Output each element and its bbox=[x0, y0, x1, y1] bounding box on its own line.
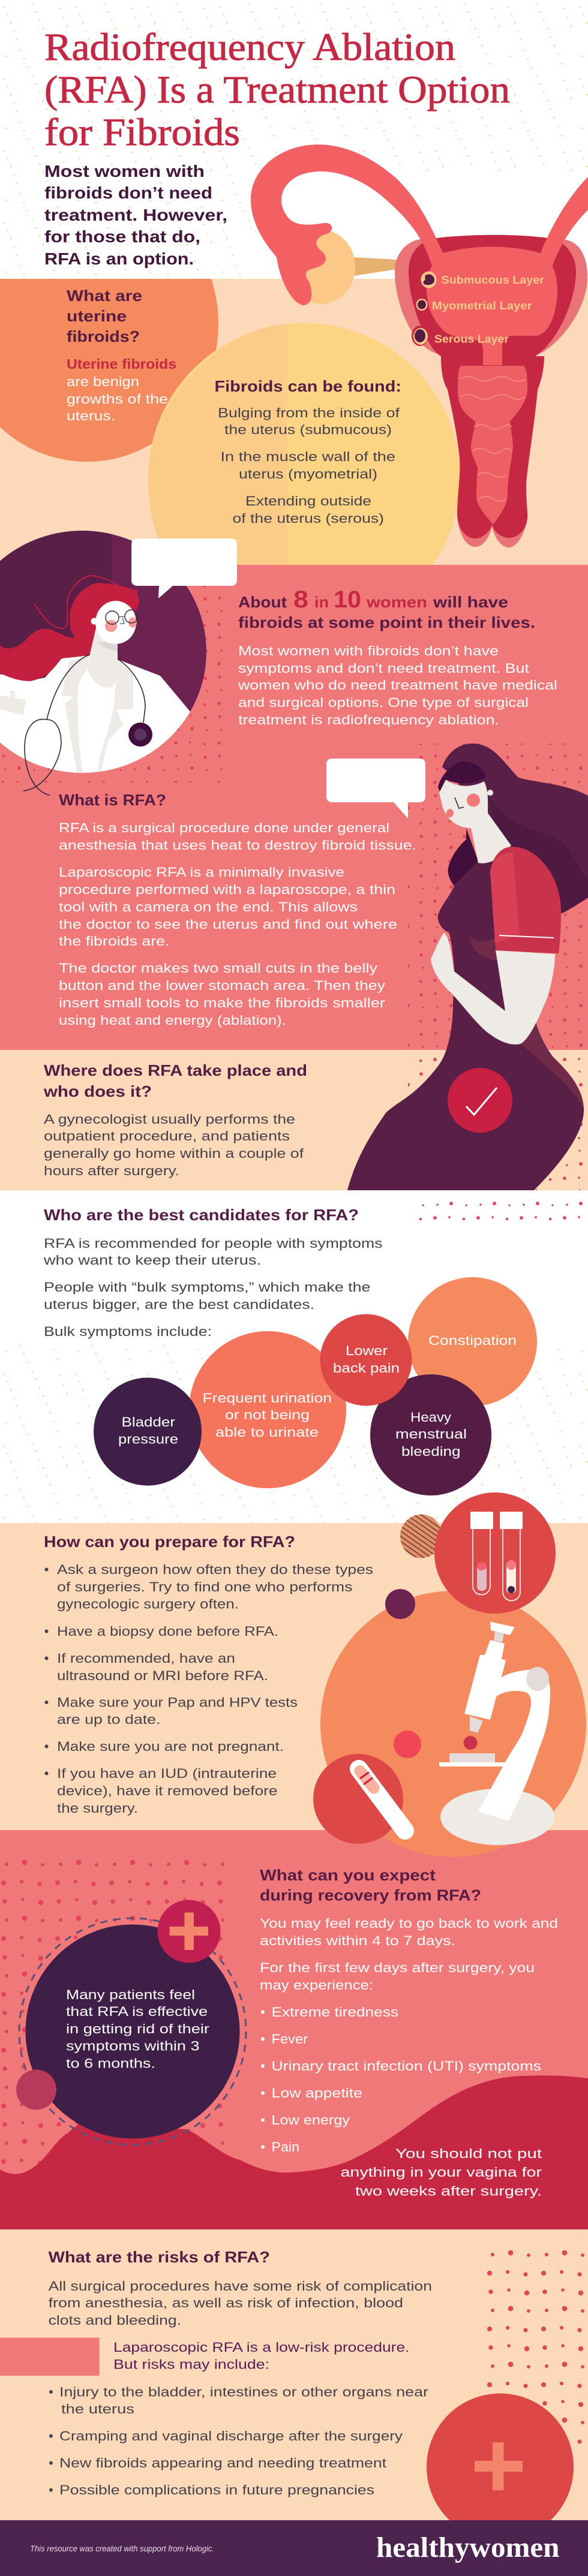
title: Radiofrequency Ablation bbox=[44, 26, 455, 69]
text: fibroids can be found: uterus (myometrial) bbox=[239, 467, 377, 482]
layer labels: Myometrial Layer bbox=[432, 300, 532, 312]
list: risks: • bbox=[49, 2455, 53, 2470]
callout: low-risk procedure: Laparoscopic RFA is a low-risk procedure. bbox=[113, 2340, 409, 2355]
list: risks: • bbox=[49, 2385, 53, 2400]
callout: patients feel RFA is effective: in getting rid of their bbox=[66, 2021, 209, 2036]
list: how to prepare: • bbox=[44, 1651, 49, 1666]
title bbox=[44, 26, 510, 154]
title: for Fibroids bbox=[44, 111, 240, 154]
panel: prepare section background bbox=[0, 1523, 588, 1830]
title: (RFA) Is a Treatment Option bbox=[44, 68, 510, 112]
text: what are uterine fibroids: uterine bbox=[67, 307, 127, 325]
footer bbox=[0, 2520, 588, 2576]
text: fibroids can be found: the uterus (submucous) bbox=[224, 422, 392, 437]
text: what are uterine fibroids: uterus. bbox=[67, 408, 115, 423]
pink circle bbox=[394, 1731, 421, 1758]
intro text bbox=[44, 162, 227, 268]
stat: 8 in 10 women: 10 bbox=[334, 586, 361, 613]
list: recovery symptoms: • bbox=[260, 2005, 265, 2020]
text: risks intro: from anesthesia, as well as risk of infection, blood bbox=[49, 2295, 403, 2310]
text: recovery warning: You should not put bbox=[395, 2146, 542, 2161]
list: risks bbox=[49, 2385, 428, 2497]
list: recovery symptoms: Low appetite bbox=[271, 2086, 362, 2100]
decorative small circle bbox=[16, 2070, 56, 2109]
illustration: woman holding abdomen bbox=[347, 744, 588, 1190]
list: how to prepare: the surgery. bbox=[57, 1801, 138, 1816]
purple circle bbox=[385, 1589, 415, 1619]
list: recovery symptoms bbox=[260, 2005, 541, 2154]
list: how to prepare: • bbox=[44, 1695, 49, 1710]
bubble: bladder pressure: pressure bbox=[118, 1432, 178, 1446]
intro text: fibroids don’t need bbox=[44, 183, 212, 202]
text: what is RFA: RFA is a surgical procedure done under general bbox=[59, 820, 389, 835]
sleeve bbox=[490, 847, 561, 953]
text: treatment overview: women who do need treatment have medical bbox=[238, 678, 557, 693]
heading: where does RFA take place bbox=[43, 1061, 307, 1100]
list: risks: Cramping and vaginal discharge after the surgery bbox=[59, 2428, 403, 2443]
text: treatment overview bbox=[238, 643, 557, 727]
list: how to prepare: Ask a surgeon how often they do these types bbox=[57, 1562, 373, 1577]
text: fibroids can be found: of the uterus (serous) bbox=[233, 511, 384, 526]
text: treatment overview: symptoms and don’t need treatment. But bbox=[238, 661, 529, 676]
panel: recovery section background bbox=[0, 1830, 588, 2229]
text: recovery: activities within 4 to 7 days. bbox=[260, 1933, 455, 1948]
outer uterus layer bbox=[395, 239, 587, 547]
text: fibroids can be found: Bulging from the inside of bbox=[218, 405, 400, 420]
text: what is RFA: Laparoscopic RFA is a minimally invasive bbox=[59, 865, 344, 880]
doctor background circle bbox=[0, 528, 206, 773]
stat: 8 in 10 women: 8 bbox=[293, 586, 308, 613]
layer labels: Submucous Layer bbox=[442, 274, 544, 286]
list: how to prepare: are up to date. bbox=[57, 1712, 161, 1727]
list: risks: Possible complications in future pregnancies bbox=[59, 2482, 374, 2497]
fibroid: submucous bbox=[421, 271, 437, 288]
text: recovery: For the first few days after surgery, you bbox=[260, 1960, 535, 1975]
text: fibroids can be found: Fibroids can be found: bbox=[215, 377, 401, 395]
text: what are uterine fibroids bbox=[67, 287, 176, 423]
callout: patients feel RFA is effective bbox=[19, 1918, 246, 2145]
text: what is RFA: the doctor to see the uterus and find out where bbox=[59, 917, 397, 932]
right fallopian tube bbox=[541, 177, 588, 267]
text: recovery warning bbox=[341, 2146, 542, 2198]
text: recovery: You may feel ready to go back to work and bbox=[260, 1916, 558, 1931]
list: how to prepare: • bbox=[44, 1739, 49, 1754]
bubble: frequent urination bbox=[189, 1331, 346, 1488]
speech bubble: woman bbox=[326, 759, 425, 818]
text: what is RFA: button and the lower stomach area. Then they bbox=[59, 978, 385, 993]
panel: peach fibroids section background bbox=[0, 279, 588, 565]
list: recovery symptoms: • bbox=[260, 2032, 265, 2047]
layer labels bbox=[432, 274, 544, 345]
panel: risks section background bbox=[0, 2229, 588, 2520]
list: recovery symptoms: • bbox=[260, 2139, 265, 2154]
panel: pink RFA section background bbox=[0, 565, 588, 1190]
speech bubble: doctor bbox=[131, 538, 237, 598]
stat: 8 in 10 women: women bbox=[366, 593, 427, 611]
heading: what is RFA: What is RFA? bbox=[59, 791, 166, 809]
layer labels: Serous Layer bbox=[434, 333, 509, 345]
text: what is RFA: anesthesia that uses heat to destroy fibroid tissue. bbox=[59, 838, 416, 853]
text: what are uterine fibroids: Uterine fibroids bbox=[67, 356, 176, 372]
text: what are uterine fibroids: growths of the bbox=[67, 392, 168, 407]
text: best candidates: uterus bigger, are the best candidates. bbox=[44, 1297, 314, 1312]
hair bbox=[442, 744, 588, 916]
stat: 8 in 10 women: will have bbox=[433, 593, 508, 611]
vaginal canal bbox=[458, 366, 527, 525]
callout: patients feel RFA is effective: to 6 months. bbox=[66, 2056, 155, 2071]
bubble: heavy menstrual bleeding: bleeding bbox=[401, 1444, 461, 1459]
list: how to prepare: ultrasound or MRI before RFA. bbox=[57, 1668, 268, 1683]
text: fibroids can be found: Extending outside bbox=[245, 493, 371, 508]
list: recovery symptoms: Extreme tiredness bbox=[271, 2005, 398, 2020]
text: where does RFA take place bbox=[44, 1112, 304, 1178]
text: treatment overview: Most women with fibroids don’t have bbox=[238, 643, 499, 658]
list: risks: • bbox=[49, 2428, 53, 2443]
list: recovery symptoms: Urinary tract infection (UTI) symptoms bbox=[271, 2059, 541, 2074]
uterine cavity bbox=[427, 247, 557, 365]
heading: where does RFA take place: who does it? bbox=[43, 1082, 152, 1100]
list: how to prepare: • bbox=[44, 1624, 49, 1639]
muscle wall bbox=[409, 235, 576, 538]
text: best candidates: who want to keep their uterus. bbox=[43, 1253, 261, 1268]
list: risks: New fibroids appearing and needing treatment bbox=[59, 2455, 386, 2470]
fibroid: serous bbox=[412, 326, 428, 346]
bubble: bladder pressure bbox=[94, 1378, 202, 1486]
text: fibroids can be found bbox=[215, 377, 401, 526]
list: how to prepare bbox=[44, 1562, 373, 1816]
text: where does RFA take place: hours after surgery. bbox=[44, 1163, 179, 1178]
list: risks: the uterus bbox=[61, 2402, 134, 2416]
text: what is RFA: insert small tools to make the fibroids smaller bbox=[59, 995, 385, 1010]
text: best candidates: People with “bulk symptoms,” which make the bbox=[44, 1280, 371, 1295]
list: how to prepare: Make sure your Pap and HPV tests bbox=[57, 1695, 298, 1710]
heading: recovery bbox=[260, 1866, 481, 1904]
callout: low-risk procedure: But risks may include: bbox=[113, 2357, 269, 2372]
illustration: uterus bbox=[251, 145, 588, 547]
text: treatment overview: and surgical options. One type of surgical bbox=[238, 695, 529, 710]
check mark badge bbox=[448, 1068, 512, 1133]
fibroid: myometrial bbox=[416, 299, 427, 311]
callout bar bbox=[0, 2337, 100, 2376]
text: where does RFA take place: A gynecologist usually performs the bbox=[44, 1112, 295, 1127]
dot pattern: recovery bbox=[0, 1850, 225, 2168]
list: recovery symptoms: • bbox=[260, 2059, 265, 2074]
text: best candidates: RFA is recommended for people with symptoms bbox=[44, 1236, 383, 1251]
footer: healthywomen bbox=[376, 2532, 559, 2563]
heading: recovery: during recovery from RFA? bbox=[260, 1886, 481, 1904]
list: recovery symptoms: Fever bbox=[271, 2032, 308, 2047]
text: what are uterine fibroids: What are bbox=[67, 287, 142, 305]
text: where does RFA take place: outpatient procedure, and patients bbox=[44, 1128, 290, 1143]
doctor face bbox=[91, 586, 138, 644]
bubble: heavy menstrual bleeding: menstrual bbox=[395, 1427, 467, 1442]
crimson wave bbox=[0, 2075, 588, 2229]
bubble: frequent urination: able to urinate bbox=[215, 1425, 319, 1440]
illustration: lab equipment bbox=[313, 1492, 586, 1857]
text: what are uterine fibroids: are benign bbox=[67, 374, 139, 389]
neck and face bbox=[438, 762, 511, 863]
list: recovery symptoms: • bbox=[260, 2112, 265, 2127]
microscope bbox=[439, 1621, 554, 1845]
heading: where does RFA take place: Where does RFA take place and bbox=[44, 1061, 307, 1079]
bubble: lower back pain bbox=[320, 1314, 412, 1406]
stethoscope bbox=[23, 655, 152, 795]
circle: fibroids can be found bbox=[148, 323, 460, 565]
bubble: frequent urination: or not being bbox=[225, 1407, 310, 1422]
bubble: constipation: Constipation bbox=[428, 1333, 517, 1348]
list: recovery symptoms: • bbox=[260, 2086, 265, 2100]
list: risks: Injury to the bladder, intestines or other organs near bbox=[59, 2385, 428, 2400]
text: risks intro: All surgical procedures have some risk of complication bbox=[49, 2279, 432, 2294]
intro text: for those that do, bbox=[44, 227, 200, 246]
heading: best candidates: Who are the best candidates for RFA? bbox=[44, 1206, 359, 1224]
dress bbox=[347, 854, 584, 1190]
list: how to prepare: gynecologic surgery often. bbox=[57, 1596, 239, 1612]
list: recovery symptoms: Pain bbox=[271, 2139, 299, 2154]
test tubes bbox=[434, 1492, 556, 1614]
text: what is RFA: the fibroids are. bbox=[59, 934, 169, 949]
list: recovery symptoms: Low energy bbox=[271, 2112, 350, 2127]
icon: plus badge bbox=[157, 1900, 221, 1963]
panel: candidates section background bbox=[0, 1190, 588, 1523]
text: what is RFA bbox=[59, 820, 416, 1028]
text: recovery warning: anything in your vagina for bbox=[341, 2165, 542, 2180]
text: what are uterine fibroids: fibroids? bbox=[67, 327, 140, 345]
doctor figure bbox=[0, 575, 190, 773]
illustration: doctor bbox=[0, 528, 210, 795]
dress shading bbox=[469, 934, 584, 1110]
callout: patients feel RFA is effective: Many patients feel bbox=[66, 1987, 195, 2002]
text: best candidates bbox=[43, 1236, 383, 1339]
list: how to prepare: If recommended, have an bbox=[57, 1651, 235, 1666]
list: how to prepare: • bbox=[44, 1766, 49, 1781]
arm bbox=[431, 932, 555, 1045]
bubble: lower back pain: back pain bbox=[333, 1361, 400, 1376]
callout: patients feel RFA is effective: that RFA is effective bbox=[66, 2004, 208, 2019]
panel: intro background bbox=[0, 0, 588, 279]
stat: 8 in 10 women bbox=[238, 586, 535, 631]
callout: low-risk procedure bbox=[113, 2340, 409, 2372]
pregnancy test bbox=[313, 1754, 405, 1844]
text: what is RFA: procedure performed with a laparoscope, a thin bbox=[59, 882, 395, 897]
callout: patients feel RFA is effective: symptoms within 3 bbox=[66, 2039, 199, 2053]
text: best candidates: Bulk symptoms include: bbox=[44, 1324, 212, 1339]
intro text: RFA is an option. bbox=[44, 249, 194, 268]
list: how to prepare: of surgeries. Try to find one who performs bbox=[57, 1579, 353, 1594]
text: what is RFA: using heat and energy (ablation). bbox=[59, 1013, 286, 1028]
text: risks intro: clots and bleeding. bbox=[49, 2313, 181, 2328]
text: recovery: may experience: bbox=[260, 1978, 373, 1993]
bubble: bladder pressure: Bladder bbox=[121, 1415, 175, 1430]
text: risks intro bbox=[49, 2279, 432, 2328]
heading: risks: What are the risks of RFA? bbox=[49, 2248, 270, 2266]
stat: 8 in 10 women: in bbox=[314, 593, 329, 611]
bubble: lower back pain: Lower bbox=[346, 1343, 388, 1358]
text: what is RFA: The doctor makes two small cuts in the belly bbox=[59, 961, 377, 976]
mottled circle bbox=[400, 1515, 442, 1558]
heading: recovery: What can you expect bbox=[260, 1866, 436, 1884]
icon: plus circle bbox=[427, 2394, 574, 2520]
heading: how to prepare: How can you prepare for RFA? bbox=[44, 1533, 295, 1551]
text: fibroids can be found: In the muscle wall of the bbox=[221, 449, 395, 464]
list: how to prepare: • bbox=[44, 1562, 49, 1577]
circle: what are uterine fibroids bbox=[0, 279, 218, 462]
bubble: heavy menstrual bleeding: Heavy bbox=[410, 1410, 451, 1425]
ovary and ligament bbox=[287, 230, 397, 304]
bubble: heavy menstrual bleeding bbox=[370, 1374, 491, 1495]
footer: This resource was created with support from Hologic. bbox=[30, 2544, 214, 2553]
bubble: frequent urination: Frequent urination bbox=[203, 1391, 332, 1406]
bubble: constipation bbox=[408, 1277, 537, 1406]
list: how to prepare: device), have it removed before bbox=[57, 1783, 277, 1798]
stat: 8 in 10 women: fibroids at some point in their lives. bbox=[238, 613, 535, 631]
stat: 8 in 10 women: About bbox=[238, 593, 287, 611]
text: where does RFA take place: generally go home within a couple of bbox=[44, 1146, 304, 1161]
list: risks: • bbox=[49, 2482, 53, 2497]
list: how to prepare: Have a biopsy done before RFA. bbox=[57, 1624, 278, 1639]
intro text: treatment. However, bbox=[44, 206, 227, 224]
text: recovery bbox=[260, 1916, 558, 1993]
list: how to prepare: If you have an IUD (intrauterine bbox=[57, 1766, 277, 1781]
large orange circle bbox=[320, 1591, 586, 1857]
list: how to prepare: Make sure you are not pregnant. bbox=[57, 1739, 284, 1754]
text: what is RFA: tool with a camera on the end. This allows bbox=[59, 899, 358, 914]
intro text: Most women with bbox=[44, 162, 205, 180]
left fallopian tube bbox=[251, 145, 443, 305]
text: treatment overview: treatment is radiofrequency ablation. bbox=[238, 712, 499, 727]
text: recovery warning: two weeks after surgery. bbox=[355, 2184, 542, 2198]
